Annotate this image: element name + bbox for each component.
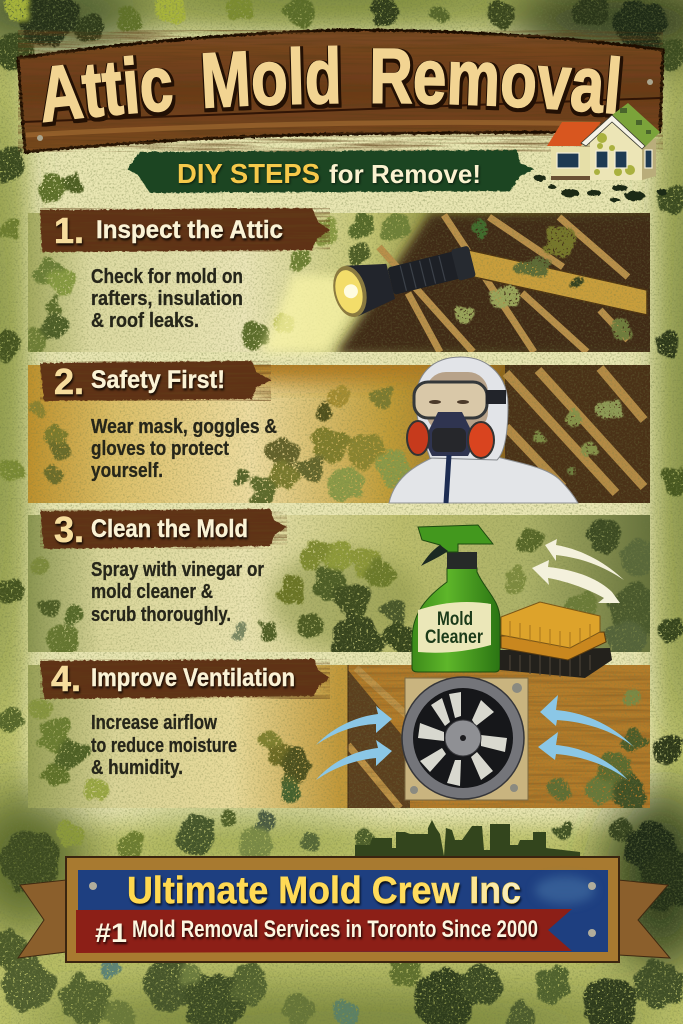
panel: step 3 clean — [28, 515, 661, 678]
tagline: #1 — [95, 918, 127, 948]
wood wall — [348, 665, 650, 808]
subtitle banner — [127, 150, 534, 193]
step 4 heading: Improve Ventilation — [91, 664, 295, 692]
step 4 body text: & humidity. — [91, 756, 183, 779]
step 1 body text — [91, 265, 243, 332]
goggles — [414, 382, 487, 418]
panel: step 1 inspect — [25, 213, 660, 355]
attic rafters — [335, 213, 660, 355]
footer sign — [66, 857, 619, 962]
step 3 label — [40, 509, 287, 550]
tagline — [95, 916, 538, 948]
number 4: 4. — [51, 658, 81, 699]
icon: flashlight — [328, 236, 478, 321]
step 1 heading: Inspect the Attic — [96, 216, 283, 244]
step 1 body text: & roof leaks. — [91, 309, 199, 332]
step 3 body text: Spray with vinegar or — [91, 558, 264, 581]
subtitle text: for Remove! — [329, 159, 481, 189]
mold patches — [31, 384, 620, 504]
number 3: 3. — [54, 509, 84, 550]
step 2 body text: yourself. — [91, 459, 163, 482]
scrub brush — [500, 602, 612, 678]
title plank — [16, 28, 665, 155]
respirator — [424, 412, 476, 456]
step 4 label — [40, 658, 330, 699]
light beam — [262, 275, 352, 352]
step 2 body text — [91, 415, 277, 482]
number 1: 1. — [54, 210, 84, 251]
icon: ventilation fan — [402, 677, 524, 799]
attic rafters — [505, 365, 655, 503]
arrows: airflow — [316, 695, 634, 780]
step 2 body text: gloves to protect — [91, 437, 229, 460]
title text: Attic Mold Removal — [42, 46, 624, 127]
step 1 label — [40, 208, 330, 252]
step 2 label — [40, 361, 271, 402]
arrows: scrub motion — [532, 539, 624, 603]
step 2 heading: Safety First! — [91, 366, 225, 394]
bottle label — [418, 602, 491, 653]
step 3 heading: Clean the Mold — [91, 515, 248, 543]
mold patches — [30, 689, 647, 812]
icon: moldy house — [534, 103, 667, 202]
spray bottle — [412, 525, 500, 672]
subtitle text — [177, 158, 481, 189]
number 2: 2. — [54, 361, 84, 402]
vent plate — [405, 678, 528, 800]
red ribbon — [76, 909, 572, 953]
step 1 body text: rafters, insulation — [91, 287, 243, 310]
panel: step 4 ventilation — [28, 665, 650, 812]
panel: step 2 safety — [28, 342, 655, 504]
step 4 body text: to reduce moisture — [91, 734, 237, 757]
spray bottle: Cleaner — [425, 627, 484, 648]
step 4 body text: Increase airflow — [91, 711, 217, 734]
tagline: Mold Removal Services in Toronto Since 2000 — [132, 916, 538, 943]
step 3 body text: scrub thoroughly. — [91, 603, 231, 626]
footer ribbon tails — [18, 880, 670, 958]
step 4 body text — [91, 711, 237, 779]
city skyline — [355, 820, 580, 858]
step 2 body text: Wear mask, goggles & — [91, 415, 277, 438]
spray bottle: Mold — [437, 609, 473, 630]
person in protective suit — [389, 357, 578, 503]
mold patches — [28, 515, 661, 664]
step 3 body text: mold cleaner & — [91, 580, 213, 603]
mold patches — [25, 213, 630, 351]
step 1 body text: Check for mold on — [91, 265, 243, 288]
step 3 body text — [91, 558, 264, 626]
subtitle text: DIY STEPS — [177, 158, 320, 189]
company name: Ultimate Mold Crew Inc — [127, 870, 521, 912]
